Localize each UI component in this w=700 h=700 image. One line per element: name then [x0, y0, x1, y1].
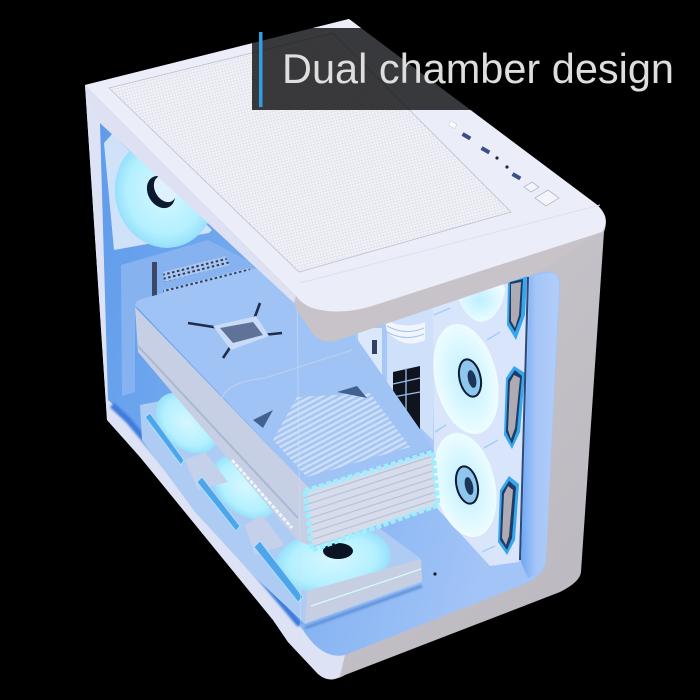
- pump block: [280, 302, 343, 342]
- title banner: [252, 28, 700, 110]
- floor fans: [140, 380, 422, 628]
- motherboard and cables: [330, 298, 435, 450]
- vent hatching: [273, 393, 410, 477]
- floor bolt: [433, 572, 437, 576]
- LED border: [305, 452, 438, 550]
- bright right glow: [521, 273, 559, 578]
- GPU bracket cutout: [188, 303, 282, 358]
- top panel: [85, 19, 606, 312]
- card logo strip: [232, 460, 292, 528]
- front IO ports: [448, 121, 559, 206]
- mesh panel: [109, 33, 511, 272]
- rear wall with PCI slots: [121, 240, 262, 396]
- title text: Dual chamber design: [282, 45, 674, 92]
- side fan edge strips: [498, 276, 528, 560]
- card front fins: [303, 452, 437, 547]
- left frame and base: [85, 85, 345, 680]
- card side: [135, 307, 313, 547]
- fan frame front: [305, 559, 422, 623]
- glass corner line: [297, 293, 301, 640]
- rear fan: [104, 128, 224, 256]
- fan frame side lighting: [145, 413, 303, 602]
- side fan panel: [423, 278, 528, 566]
- banner accent bar: [259, 32, 262, 107]
- lip under top panel: [294, 232, 600, 342]
- inner floor shadow: [112, 405, 300, 625]
- fan frame dividers: [185, 452, 285, 555]
- case frame silhouette: [85, 19, 606, 679]
- graphics card: [135, 268, 438, 550]
- connector grid: [393, 366, 420, 432]
- interior chamber: [100, 123, 560, 656]
- card top face: [135, 268, 433, 490]
